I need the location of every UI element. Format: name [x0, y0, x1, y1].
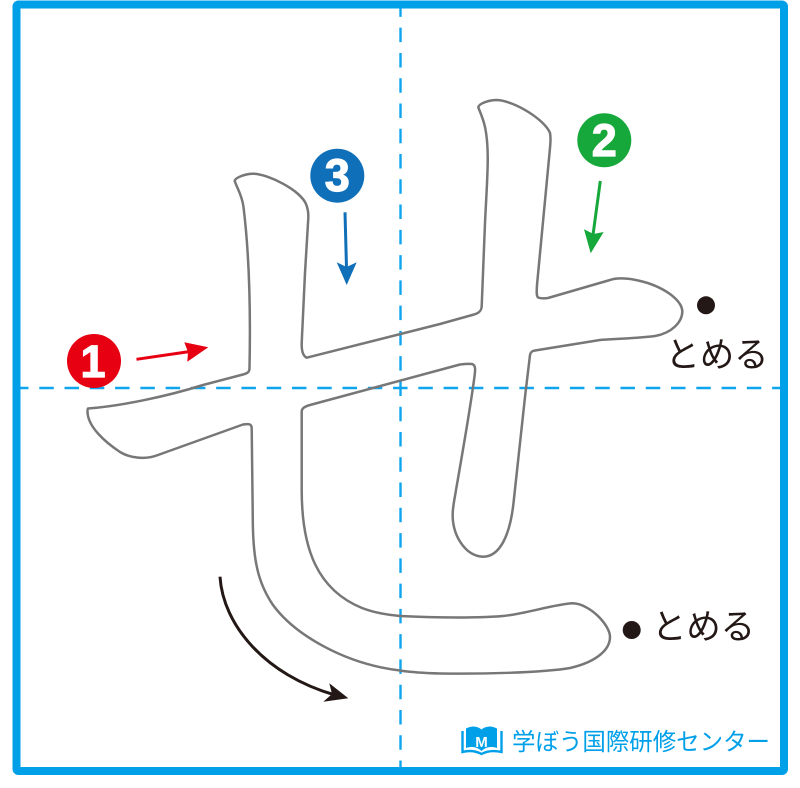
curve direction arrow: [220, 577, 348, 702]
step 1 arrow: [136, 342, 208, 362]
step 2 badge: 2: [592, 115, 617, 166]
step 2 arrow: [584, 181, 604, 253]
stop mark: upper dot: [697, 296, 715, 314]
stop label: lower: とめる: [652, 608, 755, 647]
stop label: upper: とめる: [666, 336, 768, 375]
step 1 badge: [67, 334, 121, 388]
kanji outline: 世: [88, 100, 682, 674]
icon: open book logo: M: [475, 734, 488, 751]
step 1 badge: 1: [80, 336, 106, 387]
step 3 badge: 3: [325, 150, 350, 201]
stop mark: lower dot: [623, 621, 641, 639]
icon: open book logo: [462, 727, 502, 754]
logo text: 学ぼう国際研修センター: [512, 729, 770, 756]
step 3 arrow: [337, 212, 357, 285]
step 3 badge: [310, 149, 364, 203]
step 2 badge: [577, 113, 631, 167]
